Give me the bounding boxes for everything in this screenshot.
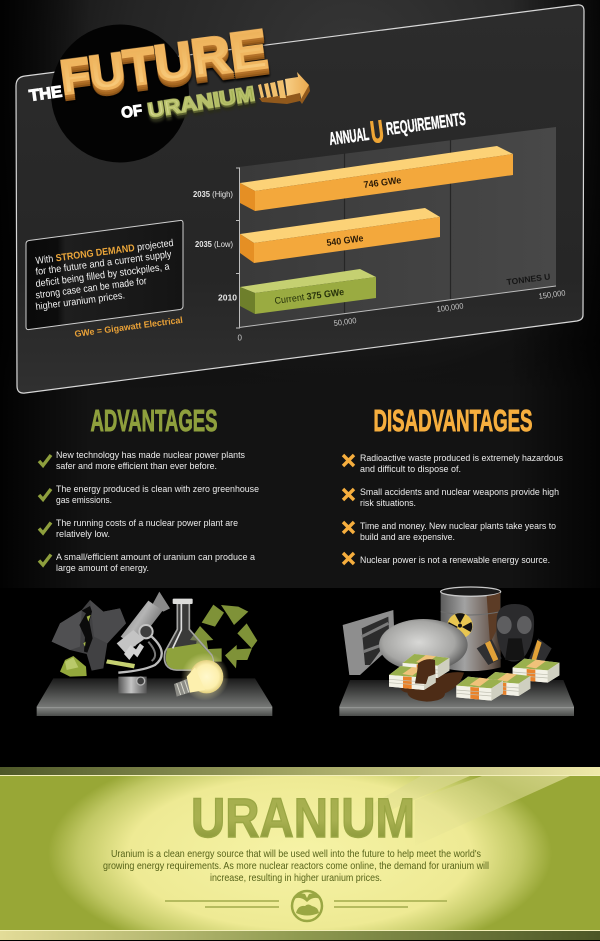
- title backdrop circle: [51, 24, 189, 162]
- banner bottom stripe: [0, 931, 600, 940]
- heading word: REQUIREMENTS: REQUIREMENTS: [385, 109, 467, 139]
- bar value: Current 375 GWe: Current 375 GWe: [274, 287, 345, 307]
- disadvantage 3: build and are expensive.: [360, 532, 455, 542]
- icon: bomb body: [379, 619, 468, 671]
- list: advantages: [39, 450, 259, 573]
- y axis label: 2035 High: 2035 (High): [193, 190, 233, 199]
- icon: recycle arrows: [190, 605, 257, 668]
- icon: radiation sign: [447, 613, 473, 638]
- y axis label: 2035 Low: 2035 (Low): [195, 240, 233, 249]
- x axis label: 0: 0: [238, 334, 242, 342]
- disadvantage 2: risk situations.: [360, 498, 416, 508]
- disadvantage 1: and difficult to dispose of.: [360, 464, 461, 474]
- advantage 3: relatively low.: [56, 529, 110, 539]
- icon: check 1: [39, 455, 51, 466]
- title: [28, 17, 310, 122]
- icon: check 2: [39, 489, 51, 500]
- advantage 2: gas emissions.: [56, 495, 112, 505]
- heading word: ANNUAL: ANNUAL: [328, 124, 370, 149]
- panel: uranium banner: [0, 767, 600, 940]
- banner background: [0, 775, 600, 931]
- panel: annual requirements: [16, 5, 584, 393]
- disadvantage 1: Radioactive waste produced is extremely hazardous: [360, 453, 563, 463]
- bar: 2010 current: [240, 269, 376, 314]
- callout text: strong case can be made for: [35, 276, 148, 301]
- icon: money stack 3: [513, 659, 559, 683]
- banner light ray 2: [415, 776, 570, 846]
- banner paragraph: increase, resulting in higher uranium prices.: [210, 873, 382, 884]
- icon: oil spill: [400, 672, 464, 702]
- bar value: 540 GWe: 540 GWe: [326, 233, 364, 249]
- banner light ray 1: [372, 776, 470, 818]
- axis title: TONNES U: TONNES U: [506, 271, 551, 287]
- callout text: [35, 238, 174, 313]
- icon: cross 4: [343, 553, 354, 564]
- icon: cross 1: [343, 455, 354, 466]
- advantage 2: The energy produced is clean with zero greenhouse: [56, 484, 259, 494]
- advantage 4: large amount of energy.: [56, 563, 149, 573]
- icon: money stack 2: [389, 666, 436, 690]
- icon: oil bite on money: [415, 659, 435, 684]
- callout text: deficit being filled by stockpiles, a: [35, 261, 171, 290]
- title word: THE: THE: [28, 83, 64, 105]
- title arrow: [258, 72, 310, 104]
- middle background band: [0, 340, 600, 588]
- disadvantage 2: Small accidents and nuclear weapons provide high: [360, 487, 559, 497]
- icon: bomb fins: [343, 610, 395, 675]
- callout text: for the future and a current supply: [35, 249, 172, 278]
- callout: strong demand: [26, 220, 183, 330]
- bar chart: [193, 127, 567, 342]
- y axis label: 2010: 2010: [218, 294, 238, 302]
- icon: flask: [164, 599, 213, 670]
- icon: money stack 1: [403, 654, 449, 678]
- bar: 2035 high: [240, 146, 513, 211]
- title word: OF: OF: [120, 102, 143, 122]
- banner title: URANIUM: [191, 786, 415, 849]
- legend note: GWe: GWe = Gigawatt Electrical: [74, 315, 183, 339]
- bar value: 746 GWe: 746 GWe: [363, 175, 402, 191]
- top background glow: [0, 0, 600, 420]
- platform: [37, 678, 272, 716]
- title word: FUTURE: FUTURE: [56, 17, 271, 106]
- banner paragraph: growing energy requirements. As more nuclear reactors come online, the demand for uranium will: [103, 861, 489, 872]
- icon: gas mask: [477, 604, 552, 665]
- bar: 2035 low: [240, 208, 440, 263]
- illustration: disadvantages: [339, 587, 574, 716]
- x axis label: 150,000: 150,000: [538, 288, 567, 301]
- advantage 1: safer and more efficient than ever before.: [56, 461, 217, 471]
- disadvantage 4: Nuclear power is not a renewable energy source.: [360, 555, 550, 565]
- icon: check 4: [39, 554, 51, 565]
- x axis label: 100,000: 100,000: [436, 301, 465, 314]
- illustration: advantages: [37, 592, 272, 716]
- icon: cross 3: [343, 522, 354, 533]
- icon: microscope: [106, 592, 170, 693]
- icon: money stack 5: [456, 677, 503, 701]
- advantage 3: The running costs of a nuclear power plant are: [56, 518, 238, 528]
- x axis label: 50,000: 50,000: [333, 316, 358, 328]
- banner top stripe: [0, 767, 600, 775]
- heading: advantages: ADVANTAGES: [90, 403, 218, 438]
- callout text: With STRONG DEMAND projected: [35, 238, 174, 267]
- icon: cross 2: [343, 489, 354, 500]
- list: disadvantages: [343, 453, 563, 565]
- banner paragraph: Uranium is a clean energy source that will be used well into the future to help meet the world's: [111, 849, 481, 860]
- advantage 4: A small/efficient amount of uranium can produce a: [56, 552, 256, 562]
- title word: URANIUM: URANIUM: [146, 83, 256, 122]
- background edge shading: [0, 0, 600, 588]
- advantage 1: New technology has made nuclear power plants: [56, 450, 245, 460]
- icon: banner emblem: [292, 891, 322, 921]
- icon: check 3: [39, 522, 51, 533]
- heading letter: U: U: [368, 114, 386, 150]
- icon: uranium rock: [52, 600, 126, 677]
- chart heading: [328, 109, 467, 150]
- icon: money stack 4: [484, 672, 530, 696]
- icon: barrel: [441, 587, 501, 671]
- disadvantage 3: Time and money. New nuclear plants take years to: [360, 521, 556, 531]
- icon: light bulb: [174, 653, 229, 701]
- chart back wall: [239, 127, 556, 327]
- platform: [339, 680, 574, 716]
- callout text: higher uranium prices.: [35, 290, 126, 313]
- banner decorative lines: [165, 901, 447, 907]
